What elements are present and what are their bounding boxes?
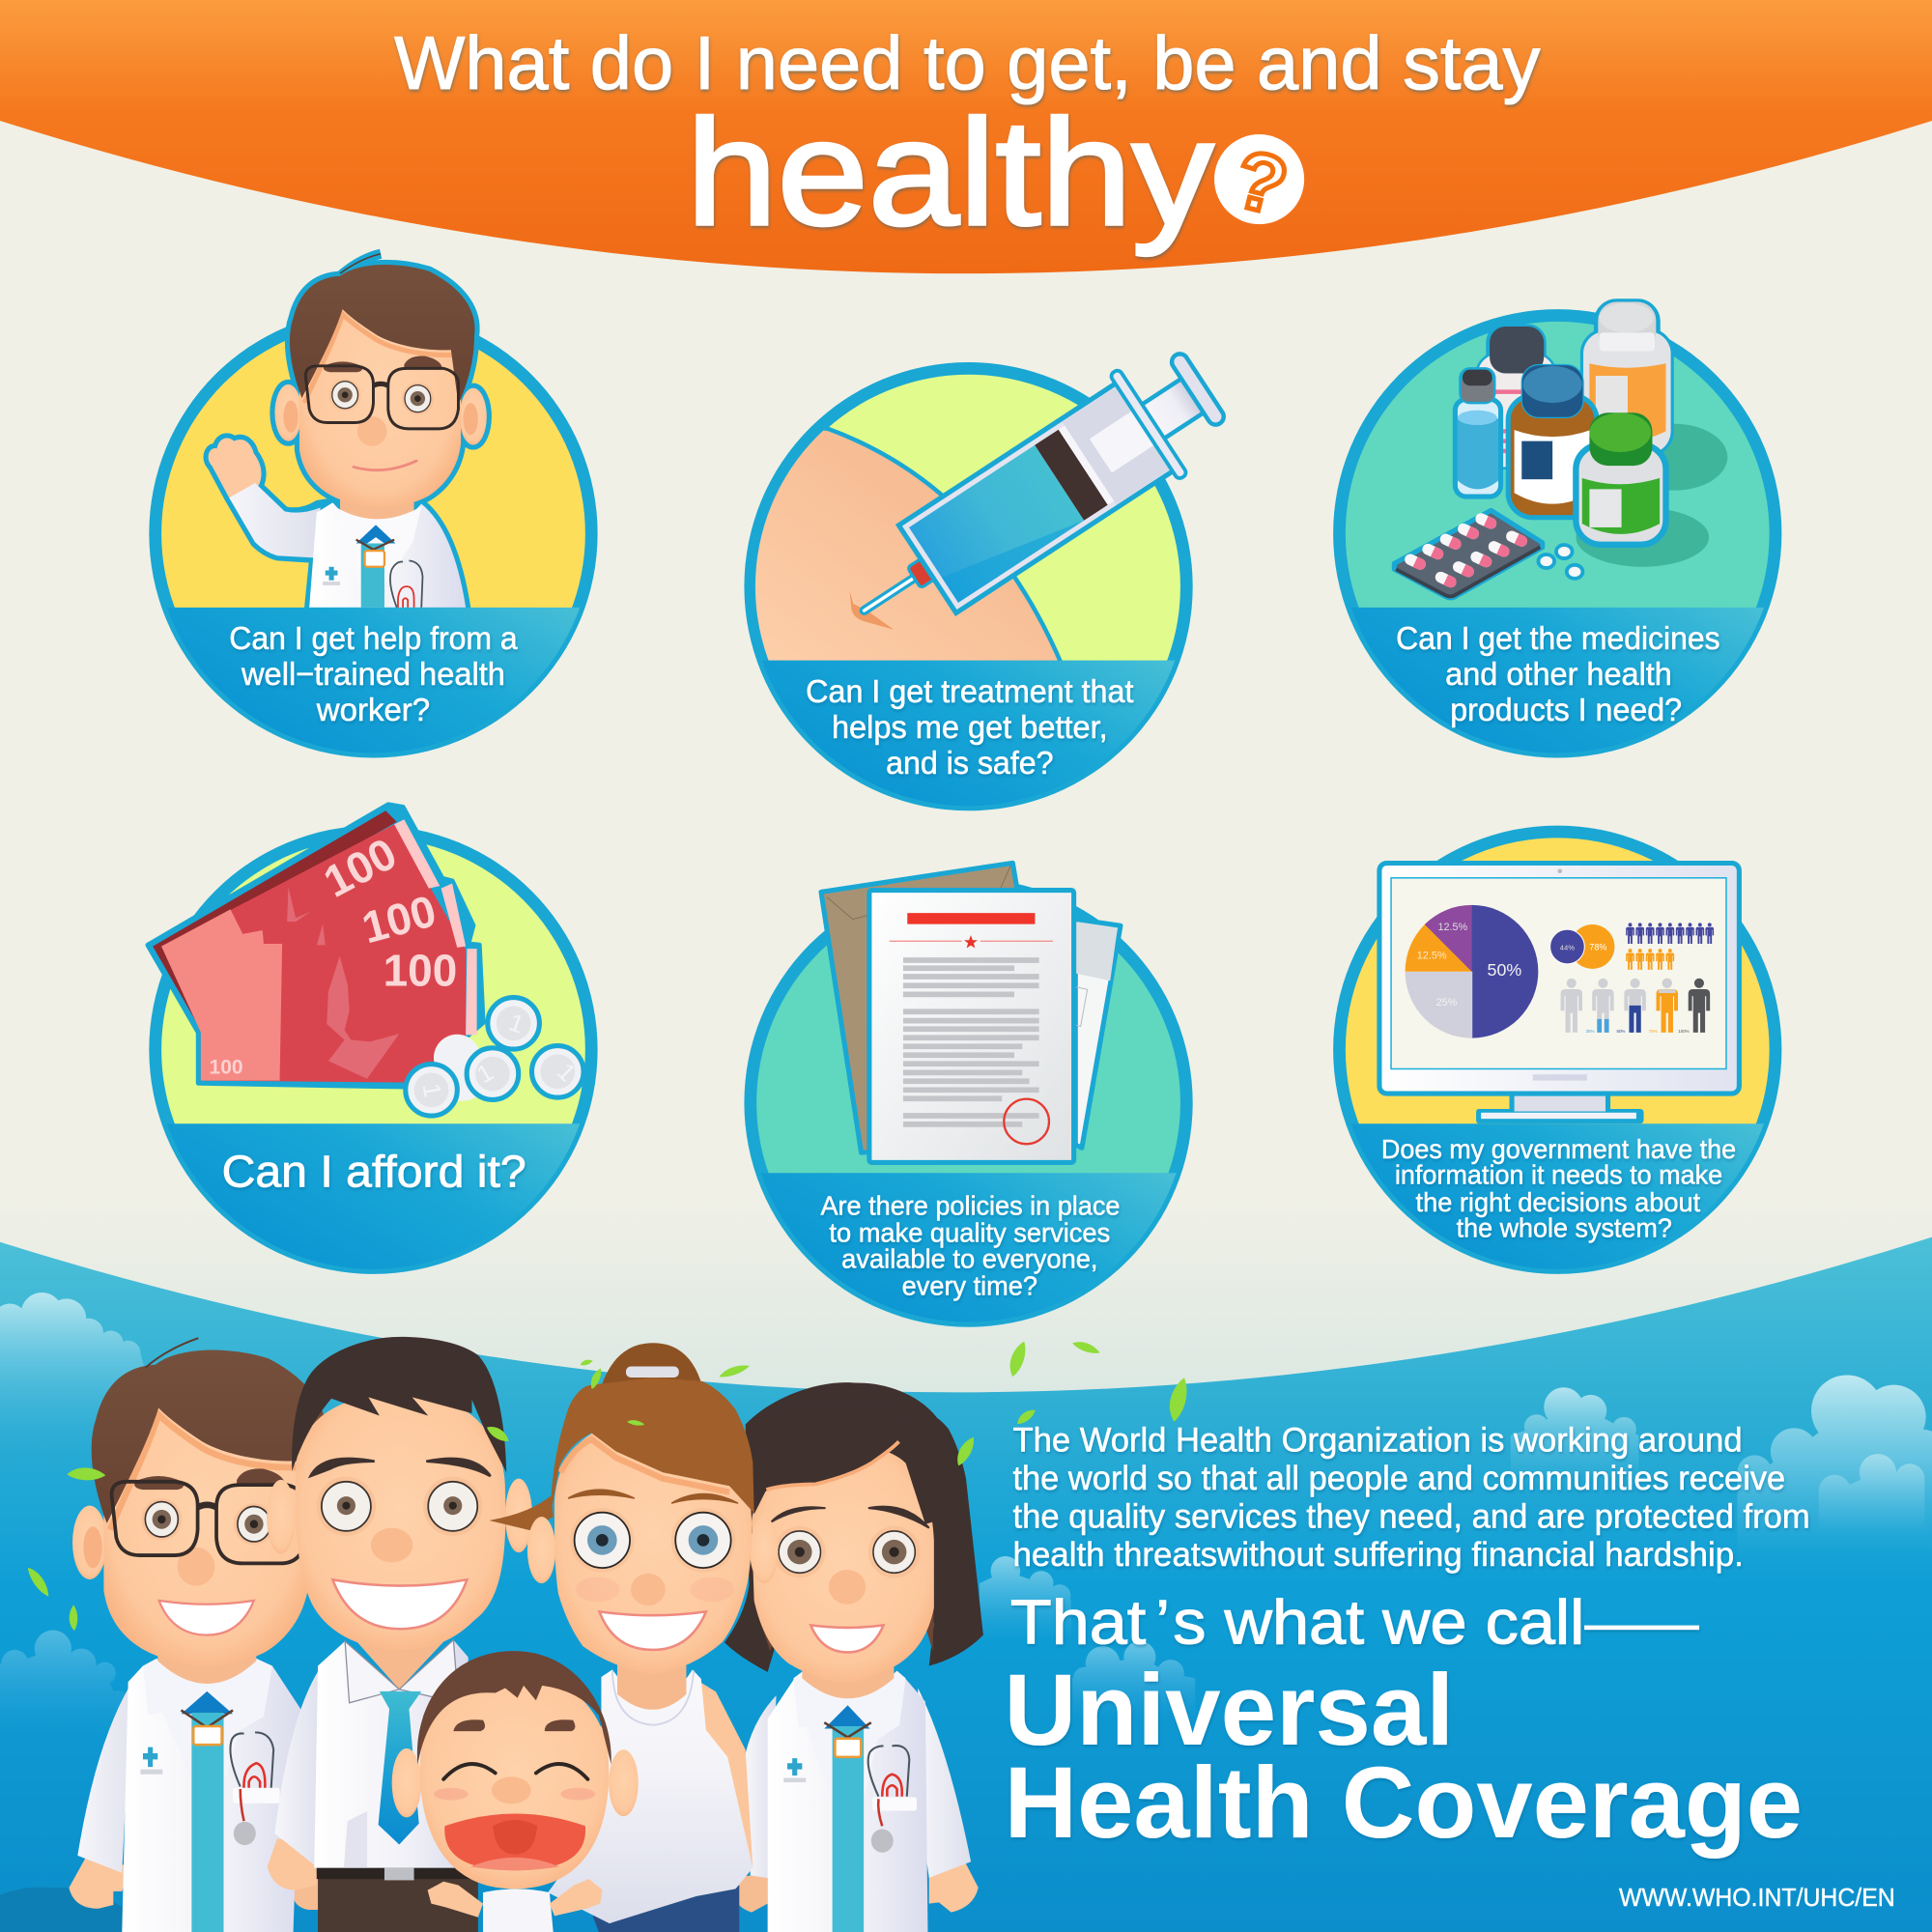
pie chart: [1405, 899, 1540, 1040]
lead-in line: [1010, 1587, 1700, 1658]
shirt sleeve: [274, 1665, 323, 1868]
pie chart: 12.5%: [1437, 922, 1468, 933]
neck: [349, 1633, 452, 1690]
banner with question: Can I get the medicines: [1396, 621, 1720, 657]
collar: [345, 1640, 458, 1703]
venn chart: [1550, 924, 1614, 969]
lead-in line: That: [1010, 1587, 1146, 1658]
pie chart: 50%: [1488, 960, 1521, 980]
stethoscope: [868, 1746, 909, 1797]
banner with question: [167, 608, 580, 753]
lapels: [143, 1659, 272, 1780]
closing paragraph: [1012, 1422, 1810, 1574]
large people percentage chart: 50%: [1616, 1029, 1625, 1034]
banner with question: the right decisions about: [1416, 1187, 1700, 1217]
trousers: [318, 1868, 478, 1932]
brows: [310, 1459, 491, 1476]
lab coat sleeve: [77, 1665, 143, 1873]
doctor right: [724, 1382, 983, 1932]
brows: [771, 1507, 929, 1528]
stethoscope: [230, 1732, 273, 1789]
people pictogram: orange row: [1626, 949, 1674, 970]
banner with question: [167, 1123, 580, 1269]
dark-capped bottle: [1477, 327, 1555, 467]
loose tablets: [1538, 545, 1582, 579]
lapels: [793, 1671, 906, 1799]
hair: [417, 1651, 611, 1765]
bun: [601, 1343, 702, 1386]
hairline shade: [560, 1439, 729, 1492]
title: What do I need to get, be and stay: [394, 22, 1540, 105]
people pictogram: navy row: [1626, 923, 1714, 944]
coins: 1: [417, 1081, 446, 1099]
banner with question: every time?: [902, 1271, 1037, 1301]
monitor: [1379, 863, 1739, 1123]
collar chevron: [356, 525, 395, 543]
tank top: [548, 1669, 753, 1923]
tie: [361, 543, 384, 608]
banner with question: well−trained health: [241, 657, 505, 693]
tie: [191, 1713, 224, 1932]
title: healthy: [686, 88, 1214, 256]
banner with question: information it needs to make: [1395, 1160, 1722, 1190]
open mouth: [444, 1814, 585, 1870]
clouds: [0, 1293, 1932, 1737]
pie chart: 12.5%: [1417, 950, 1447, 961]
tie: [379, 1691, 421, 1844]
banner with question: and other health: [1445, 657, 1672, 693]
banner with question: Can I afford it?: [222, 1146, 526, 1196]
website url: WWW.WHO.INT/UHC/EN: [1619, 1885, 1895, 1912]
doctor left: [69, 1338, 342, 1932]
lower blue wave background: [0, 1237, 1932, 1932]
banknotes: 100: [384, 945, 457, 995]
eyes: [317, 1477, 482, 1536]
falling leaves: [26, 1338, 1193, 1631]
coat sleeve: [229, 483, 321, 558]
lab coat: [768, 1679, 927, 1932]
lab coat: [122, 1665, 300, 1932]
face: [554, 1419, 752, 1674]
large people percentage chart: 75%: [1649, 1029, 1658, 1034]
banner with question: and is safe?: [886, 746, 1054, 781]
banner with question: Can I get treatment that: [806, 674, 1133, 710]
closing paragraph: health threatswithout suffering financial hardship.: [1012, 1536, 1744, 1574]
doctor waving: [209, 254, 487, 608]
ears: [527, 1517, 555, 1583]
banner with question: [761, 1173, 1177, 1322]
arm: [701, 1683, 753, 1868]
hair back: [724, 1382, 983, 1672]
baby: [392, 1651, 639, 1932]
id badge: [193, 1726, 222, 1745]
panel: health worker: [149, 254, 598, 757]
universal health coverage heading: Health Coverage: [1005, 1747, 1803, 1860]
banner with question: Can I get help from a: [229, 621, 518, 657]
bottle shadows: [1576, 424, 1727, 567]
neck: [617, 1651, 686, 1710]
face: [420, 1673, 609, 1889]
brows: [568, 1490, 738, 1503]
lab coat sleeves: [746, 1695, 777, 1879]
banner with question: Are there policies in place: [820, 1191, 1120, 1221]
large people percentage chart: 25%: [1586, 1029, 1595, 1034]
coins: 1: [552, 1058, 581, 1087]
venn chart: 44%: [1560, 943, 1575, 952]
closing paragraph: The World Health Organization is working around: [1012, 1422, 1743, 1460]
blue vial: [1455, 370, 1501, 497]
universal health coverage heading: Universal: [1005, 1654, 1454, 1767]
coins: [406, 998, 583, 1116]
smile: [159, 1601, 254, 1635]
raised hand: [209, 438, 262, 497]
shorts: [593, 1886, 739, 1932]
arm: [739, 419, 1062, 666]
venn chart: 78%: [1589, 942, 1606, 952]
syringe: [827, 334, 1240, 665]
smile: [810, 1625, 884, 1652]
cross emblem: [326, 567, 337, 581]
neck: [157, 1651, 256, 1684]
banner with question: to make quality services: [829, 1218, 1110, 1248]
question mark badge: ?: [1226, 132, 1296, 233]
document: [869, 891, 1074, 1162]
large people percentage chart: [1561, 979, 1710, 1034]
eyes: [774, 1526, 920, 1577]
top orange banner: [0, 0, 1932, 273]
banner with question: Does my government have the: [1381, 1134, 1736, 1164]
mother: [489, 1343, 778, 1932]
eyes: [570, 1508, 735, 1573]
family and doctors illustration: [69, 1337, 983, 1932]
neck: [802, 1651, 894, 1698]
hair wisp: [340, 254, 381, 273]
large people percentage chart: 100%: [1678, 1029, 1690, 1034]
panel: medicines: [1333, 301, 1781, 757]
universal health coverage heading: [1005, 1654, 1803, 1860]
panel: policies: [744, 863, 1193, 1327]
banner with question: worker?: [316, 693, 430, 728]
neck: [340, 493, 414, 525]
lead-in line: ——: [1584, 1587, 1700, 1658]
banknotes: 100: [210, 1057, 243, 1079]
envelope: [821, 863, 1018, 1152]
orange bottle: [1583, 301, 1671, 453]
smile: [600, 1611, 706, 1650]
blister pack: [1394, 510, 1543, 598]
pie chart: 25%: [1436, 997, 1458, 1009]
smile: [354, 461, 416, 470]
ears: [267, 1480, 295, 1553]
head: [72, 1350, 342, 1665]
panel: information: [1333, 826, 1781, 1274]
banner with question: available to everyone,: [841, 1243, 1097, 1273]
banner with question: [762, 661, 1175, 806]
stethoscope: [390, 560, 423, 608]
banner with question: products I need?: [1450, 693, 1682, 728]
panel: affordability: [148, 805, 598, 1274]
tie: [833, 1726, 864, 1932]
banner with question: [1350, 608, 1764, 753]
father: [267, 1337, 532, 1932]
hair: [292, 1337, 506, 1472]
lab coat: [309, 502, 466, 608]
closing paragraph: the world so that all people and communities receive: [1012, 1460, 1785, 1497]
shirt: [314, 1640, 469, 1868]
title: [394, 22, 1540, 256]
banknotes: 100: [316, 828, 405, 907]
brown bottle: [1508, 365, 1597, 518]
lead-in line: ’: [1155, 1587, 1170, 1658]
back paper: [1075, 920, 1121, 1148]
id badge: [365, 551, 384, 567]
id badge: [835, 1739, 861, 1757]
banner with question: the whole system?: [1457, 1213, 1672, 1243]
banner with question: [1350, 1123, 1764, 1269]
coins: 1: [505, 1009, 527, 1039]
coins: 1: [472, 1059, 498, 1089]
banner with question: helps me get better,: [832, 710, 1108, 746]
closing paragraph: the quality services they need, and are protected from: [1012, 1498, 1810, 1536]
smile: [332, 1579, 467, 1629]
face: [296, 1395, 505, 1650]
banknotes: [148, 805, 483, 1087]
face: [752, 1450, 934, 1683]
ponytail wisp: [489, 1495, 554, 1530]
hair wisp: [146, 1338, 198, 1368]
hair: [551, 1378, 754, 1513]
banknotes: 100: [356, 885, 441, 952]
panel: treatment: [739, 334, 1240, 810]
green bottle: [1576, 412, 1665, 545]
fringe: [751, 1383, 955, 1524]
lead-in line: s what we call: [1173, 1587, 1584, 1658]
